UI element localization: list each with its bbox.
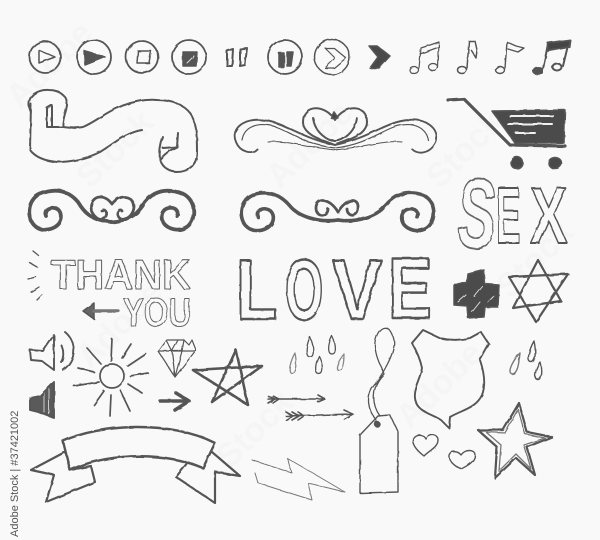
icon: shield	[412, 330, 489, 428]
icon: heart small right	[449, 450, 475, 469]
text: THANK YOU with arrow	[51, 251, 191, 335]
watermark: Stock	[69, 103, 161, 196]
ornament: scroll flourish	[241, 193, 434, 231]
icon: pause outline	[227, 48, 247, 66]
icon: feathered arrows	[268, 395, 353, 420]
watermark: Stock	[419, 103, 511, 196]
icon: filled double note	[534, 40, 570, 74]
icon: hatched plus	[454, 270, 499, 318]
watermark: Adobe	[259, 94, 360, 196]
icon: raindrops left	[290, 336, 344, 374]
icon: sun	[74, 339, 148, 416]
icon: heart small	[413, 435, 438, 456]
text: LOVE: E	[388, 240, 432, 337]
ribbon banner: curved with tails	[31, 427, 240, 503]
text: LOVE	[236, 240, 432, 338]
ornament: spiral flourish	[29, 191, 194, 230]
icon: stop filled	[172, 40, 206, 74]
icon: filled speaker	[30, 382, 54, 418]
icon: diamond	[158, 340, 196, 377]
icon: flag note	[496, 42, 524, 74]
icon: chevron	[369, 46, 390, 68]
watermark: Stock	[209, 383, 301, 476]
icon: raindrops right	[510, 341, 541, 379]
icon: double note	[410, 42, 439, 74]
icon: pause filled	[268, 40, 302, 74]
icon: radiating dashes	[28, 251, 42, 300]
icon: play outline	[30, 42, 60, 72]
icon: play filled	[77, 40, 111, 74]
watermark: Adobe	[389, 334, 490, 436]
icon: six-pointed star	[509, 260, 568, 322]
icon: left arrow	[83, 303, 118, 319]
icon: hang tag	[360, 328, 398, 493]
icon: next circle	[314, 40, 350, 74]
icon: shopping cart	[448, 99, 565, 169]
icon: single note	[458, 41, 477, 74]
text: LOVE: O	[285, 242, 323, 337]
text: SEX: S	[453, 158, 501, 271]
text: SEX: X	[530, 170, 567, 260]
text: THANK YOU with arrow: YOU	[123, 291, 191, 335]
icon: right arrow	[160, 393, 189, 410]
watermark: Stock	[489, 213, 581, 306]
watermark: Adobe	[69, 274, 170, 376]
text: LOVE: V	[332, 243, 382, 337]
side credit text: Adobe Stock | #37421002	[9, 411, 21, 537]
text: SEX	[453, 158, 567, 271]
icon: outlined star	[478, 403, 552, 478]
icon: stop outline	[126, 41, 158, 73]
icon: lightning bolt	[252, 458, 345, 500]
icon: sketched star	[193, 350, 262, 405]
text: SEX: E	[496, 172, 521, 261]
watermark: Adobe	[0, 14, 100, 116]
text: LOVE: L	[236, 243, 278, 338]
ribbon banner: wavy scroll	[29, 90, 197, 172]
icon: speaker with sound	[30, 332, 74, 370]
text: THANK YOU with arrow: THANK	[51, 251, 191, 298]
ornament: heart flourish	[235, 108, 437, 153]
